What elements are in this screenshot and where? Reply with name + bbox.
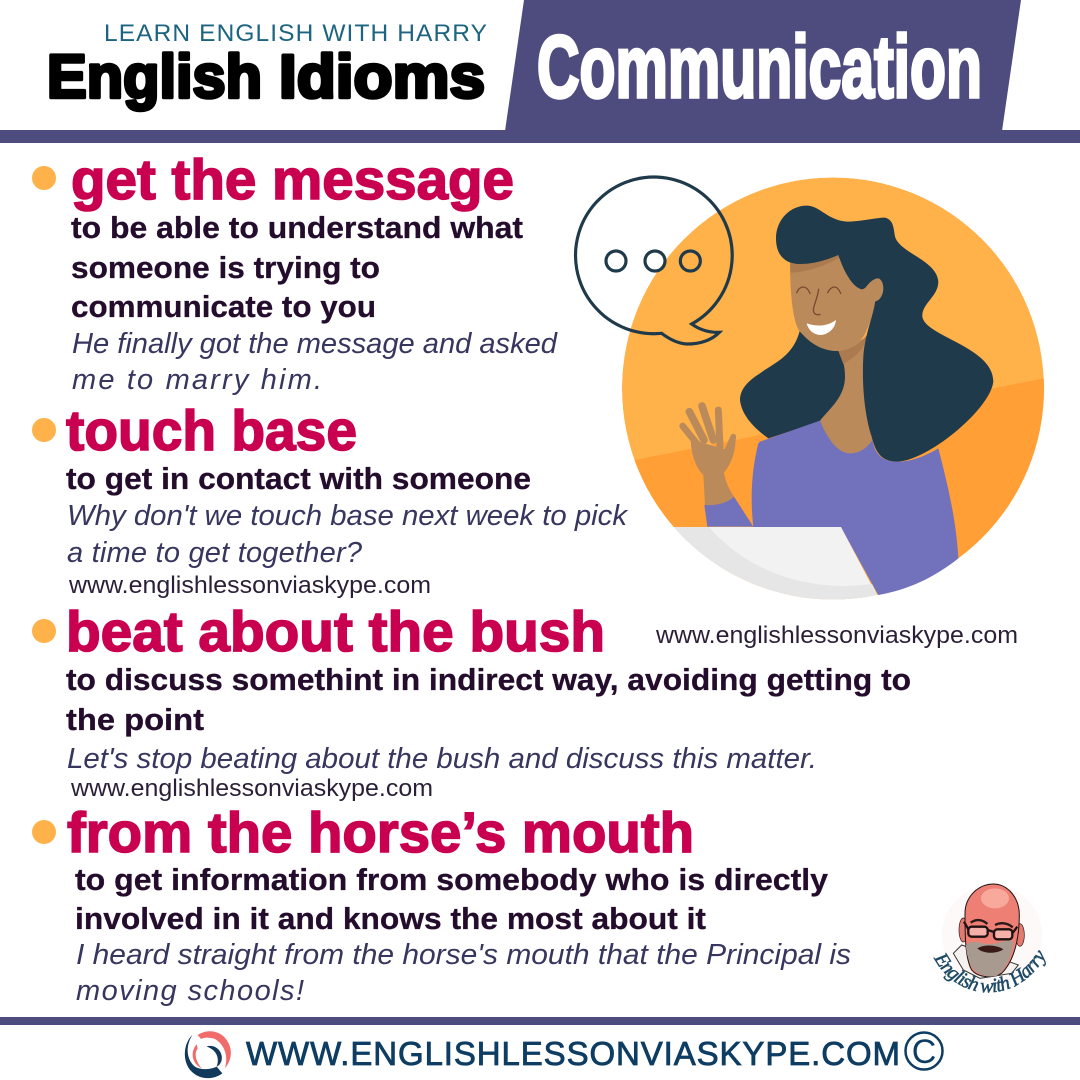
definition: involved in it and knows the most about it xyxy=(75,901,706,936)
example: me to marry him. xyxy=(72,364,322,396)
title: English Idioms: English xyxy=(47,42,262,110)
example: Why don't we touch base next week to pick xyxy=(67,500,629,532)
idiom 2: touch base xyxy=(32,399,629,599)
header band xyxy=(0,130,1080,143)
footer url: WWW.ENGLISHLESSONVIASKYPE.COM xyxy=(246,1035,900,1072)
definition: to discuss somethint in indirect way, avoiding getting to xyxy=(66,662,911,697)
footer logo xyxy=(185,1031,231,1078)
idiom heading: from the horse’s mouth xyxy=(67,801,694,865)
definition: communicate to you xyxy=(71,289,376,324)
example: Let's stop beating about the bush and discuss this matter. xyxy=(67,743,817,775)
left hair xyxy=(740,330,847,438)
ears xyxy=(959,918,968,942)
website: www.englishlessonviaskype.com xyxy=(68,572,431,599)
speech bubble xyxy=(576,177,732,344)
example: a time to get together? xyxy=(67,537,363,569)
neck xyxy=(820,337,873,453)
shirt xyxy=(752,421,958,595)
idiom heading: touch base xyxy=(66,399,357,463)
brows xyxy=(971,920,1013,927)
copyright symbol xyxy=(906,1032,942,1071)
illustration: woman waving xyxy=(576,177,1060,620)
idiom heading: beat about the bush xyxy=(66,600,605,664)
eyes and nose xyxy=(797,287,841,315)
example: moving schools! xyxy=(76,975,304,1007)
smile xyxy=(807,320,836,335)
forehead shadow xyxy=(790,253,839,273)
neck shadow xyxy=(838,333,868,364)
portrait: Harry badge xyxy=(933,884,1046,993)
ear xyxy=(865,278,883,302)
mouth xyxy=(977,946,1003,953)
definition: to get information from somebody who is directly xyxy=(75,862,829,897)
bullet xyxy=(32,619,56,643)
example: I heard straight from the horse's mouth that the Principal is xyxy=(76,939,851,971)
head xyxy=(965,884,1019,977)
website: www.englishlessonviaskype.com xyxy=(70,775,433,802)
beard xyxy=(966,941,1013,977)
main hair xyxy=(776,206,993,462)
definition: to get in contact with someone xyxy=(66,461,531,496)
head highlight xyxy=(981,888,1009,908)
bullet xyxy=(32,820,56,844)
definition: to be able to understand what xyxy=(71,210,523,245)
bullet xyxy=(32,418,56,442)
waving hand and sleeve xyxy=(683,406,753,527)
copyright symbol: C xyxy=(912,1033,936,1071)
idiom 1: get the message xyxy=(32,148,558,396)
background circle xyxy=(622,178,1044,600)
header panel: communication xyxy=(505,0,1021,131)
footer band xyxy=(0,1017,1080,1025)
idiom 4: from the horse's mouth xyxy=(32,801,851,1007)
signature: English with Harry xyxy=(933,950,1046,993)
example: He finally got the message and asked xyxy=(72,328,558,360)
laptop xyxy=(674,527,878,600)
definition: the point xyxy=(66,702,204,737)
idiom 3: beat about the bush xyxy=(32,600,911,802)
glasses xyxy=(964,922,1017,939)
face xyxy=(790,250,875,351)
bullet xyxy=(32,166,56,190)
collar xyxy=(953,945,1018,978)
idiom heading: get the message xyxy=(71,148,514,212)
kicker: learn english with harry: LEARN ENGLISH WITH HARRY xyxy=(104,20,487,47)
definition: someone is trying to xyxy=(71,250,380,285)
website: right: www.englishlessonviaskype.com xyxy=(655,622,1018,649)
title: English Idioms: Idioms xyxy=(279,42,485,110)
